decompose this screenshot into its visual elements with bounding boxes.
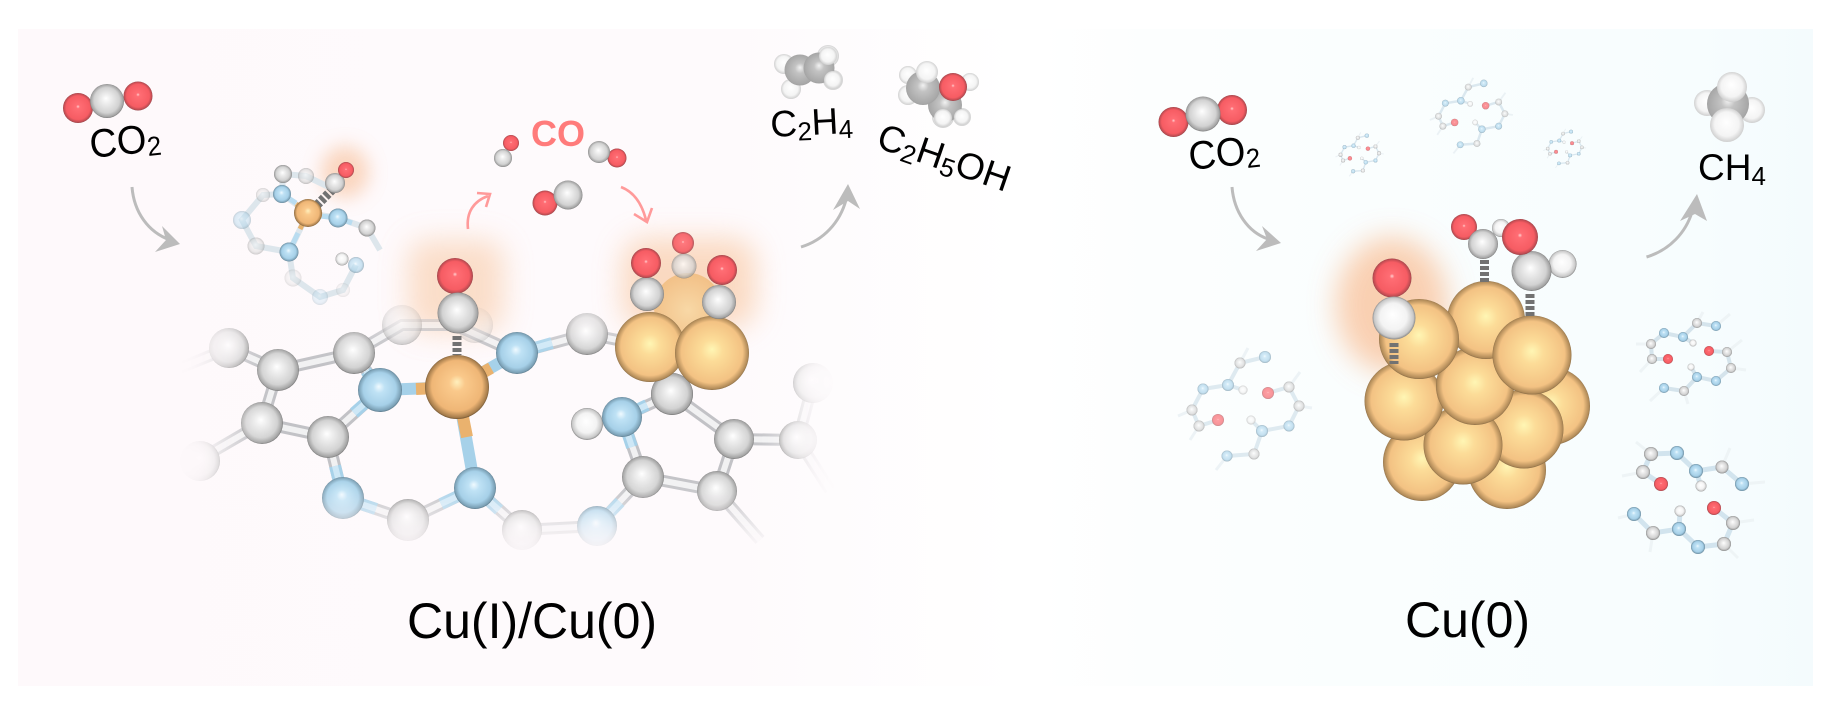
arrow: to CH4 — [1646, 194, 1707, 257]
molecule: CO2 left — [63, 82, 152, 123]
CO on Cu(I) — [437, 258, 478, 355]
arrow: red up — [468, 193, 490, 229]
molecule: CO small 2 — [588, 141, 626, 168]
CHO on cluster — [1451, 214, 1510, 283]
amine NH group — [571, 373, 693, 440]
label: C2H5OH: H — [911, 129, 950, 177]
label: C2H5OH: C — [872, 116, 911, 163]
bonds — [170, 325, 830, 540]
molecule: CO small 1 — [494, 135, 519, 167]
molecule: CH4 — [1694, 72, 1765, 142]
cluster: Cu(0) nanoparticle — [1364, 281, 1590, 509]
label: Cu(I)/Cu(0): Cu(I)/Cu(0) — [407, 593, 657, 649]
panel: Cu(I)/Cu(0) background — [18, 29, 1018, 686]
molecule: CO small 3 — [532, 180, 582, 216]
arrow: red down — [621, 187, 652, 222]
fragment: right lower — [1618, 442, 1765, 558]
cluster: Cu nanocluster with CO — [615, 232, 749, 390]
label: C2H5OH: OH — [950, 143, 1016, 199]
CHO on cluster right — [1502, 219, 1577, 316]
fragment: top right — [1543, 129, 1586, 168]
atom: N redraw — [358, 332, 538, 509]
label: C2H5OH: 5 — [936, 151, 959, 184]
label: CH4: 4 — [1751, 161, 1766, 191]
atom: Cu(I) — [425, 355, 489, 419]
arrow: CO2 to catalyst — [132, 187, 180, 252]
molecule: C2H5OH — [898, 61, 979, 128]
label: Cu(0): Cu(0) — [1405, 592, 1530, 648]
label: C2H4: H — [810, 100, 839, 143]
fragment: top center — [1430, 78, 1513, 153]
Cu bonds — [380, 353, 517, 488]
glow: small catalyst — [321, 146, 369, 198]
label: CO2 left: CO — [87, 117, 149, 167]
fragment: top left — [1336, 132, 1384, 176]
label: CO2 left: 2 — [146, 130, 163, 162]
molecule: CO label: CO — [531, 113, 585, 154]
fragment: right upper — [1636, 312, 1746, 404]
Cu bond copper segments — [416, 368, 491, 437]
label: CO2 right: 2 — [1245, 142, 1262, 174]
label: C2H5OH: 2 — [897, 138, 920, 171]
glow: single-atom site — [408, 240, 504, 332]
label: CO2 right: CO — [1186, 129, 1248, 179]
label: CH4: CH — [1698, 147, 1751, 188]
CO on Cu(0) cluster — [1372, 258, 1416, 364]
molecule: small catalyst — [233, 162, 380, 305]
arrow: CO2 to cluster right — [1232, 187, 1281, 251]
fragment: left — [1178, 348, 1312, 470]
label: C2H4: C — [769, 103, 798, 145]
glow: cluster site — [622, 238, 756, 328]
molecule: C2H4 — [774, 45, 843, 99]
glow: Cu(0) cluster site — [1336, 237, 1448, 373]
label: C2H4: 4 — [838, 114, 854, 144]
molecule: CO2 right — [1158, 95, 1247, 137]
atoms — [180, 305, 833, 550]
diagram: main Cu(I) framework — [170, 305, 833, 550]
panel: Cu(0) background — [1040, 29, 1813, 686]
arrow: to products left — [801, 184, 860, 247]
label: C2H4: 2 — [797, 116, 813, 147]
